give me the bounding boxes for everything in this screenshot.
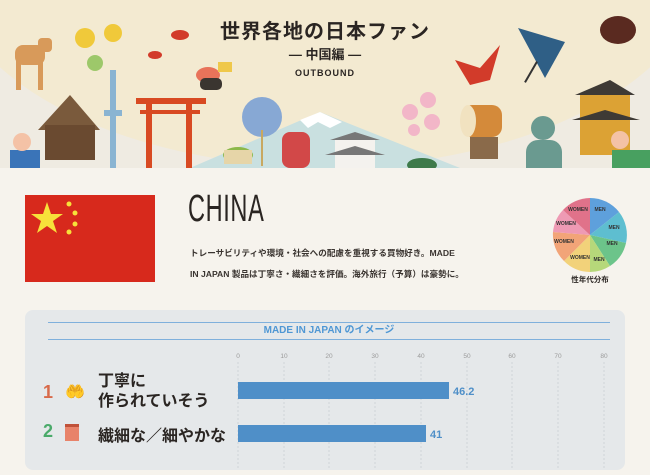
icon: castle <box>325 132 385 168</box>
item 1 label: 1 <box>43 382 53 402</box>
item 2 label <box>43 421 226 445</box>
pie chart: gender/age: 性年代分布 <box>571 275 609 284</box>
bar chart: 50 <box>463 353 471 360</box>
header illustration <box>0 0 650 168</box>
icon: tower <box>104 70 122 180</box>
icon: buddha <box>526 116 562 180</box>
title: OUTBOUND <box>295 68 355 78</box>
pie chart: gender/age: WOMEN <box>570 255 590 261</box>
bar chart: 30 <box>371 353 379 360</box>
pie chart: gender/age: WOMEN <box>556 221 576 227</box>
bar chart: 80 <box>600 353 608 360</box>
pie chart: gender/age: MEN <box>593 257 605 263</box>
bar chart: 20 <box>325 353 333 360</box>
icon: bowl <box>600 16 636 44</box>
bar chart: 41 <box>430 429 442 441</box>
icon: goldfish <box>148 30 189 59</box>
description <box>190 248 464 279</box>
pie chart: gender/age: MEN <box>606 241 618 247</box>
description: トレーサビリティや環境・社会への配慮を重視する買物好き。MADE <box>190 248 455 258</box>
pie chart: gender/age: WOMEN <box>568 207 588 213</box>
pie chart: gender/age <box>552 198 627 284</box>
bar chart: 46.2 <box>453 386 474 398</box>
item 1 label: 🤲 <box>65 384 85 401</box>
bar chart: 40 <box>417 353 425 360</box>
panel heading: MADE IN JAPAN のイメージ <box>264 325 394 336</box>
icon: sushi <box>196 62 232 90</box>
flag: China <box>25 195 155 282</box>
bar chart: 0 <box>236 353 240 360</box>
panel heading <box>48 322 610 340</box>
icon: matcha <box>223 147 253 164</box>
icon: thatched house <box>38 95 100 160</box>
item 1 label: 作られていそう <box>98 393 210 410</box>
item 1 label: 丁寧に <box>98 373 146 390</box>
title <box>220 20 430 78</box>
icon: torii <box>136 98 206 168</box>
item 2 label: 2 <box>43 421 53 441</box>
icon: ginkgo leaves <box>75 24 122 71</box>
icon: lantern <box>282 132 310 168</box>
icon: pavilion <box>572 80 640 155</box>
icon: mount fuji <box>190 112 460 168</box>
item 1 label <box>43 372 210 410</box>
icon: crane <box>455 45 500 85</box>
icon: umbrella <box>518 28 565 83</box>
pie chart: gender/age: MEN <box>594 207 606 213</box>
bar chart: 70 <box>554 353 562 360</box>
icon: pine <box>407 158 463 183</box>
heading: CHINA: CHINA <box>188 188 264 230</box>
title: 世界各地の日本ファン <box>220 21 430 43</box>
panel: MADE IN JAPAN image chart <box>25 310 625 470</box>
icon: dog <box>15 38 52 90</box>
pie chart: gender/age: MEN <box>608 225 620 231</box>
bar chart <box>236 353 608 468</box>
item 2 label: 繊細な／細やかな <box>98 428 226 445</box>
icon: hands <box>10 131 650 168</box>
pie chart: gender/age: WOMEN <box>554 239 574 245</box>
icon: fan <box>242 97 282 166</box>
bar chart: 60 <box>508 353 516 360</box>
icon: sakura <box>402 92 440 136</box>
title: — 中国編 — <box>289 47 361 62</box>
description: IN JAPAN 製品は丁寧さ・繊細さを評価。海外旅行（予算）は豪勢に。 <box>190 269 464 279</box>
bar chart: 10 <box>280 353 288 360</box>
icon: drum <box>460 105 502 159</box>
